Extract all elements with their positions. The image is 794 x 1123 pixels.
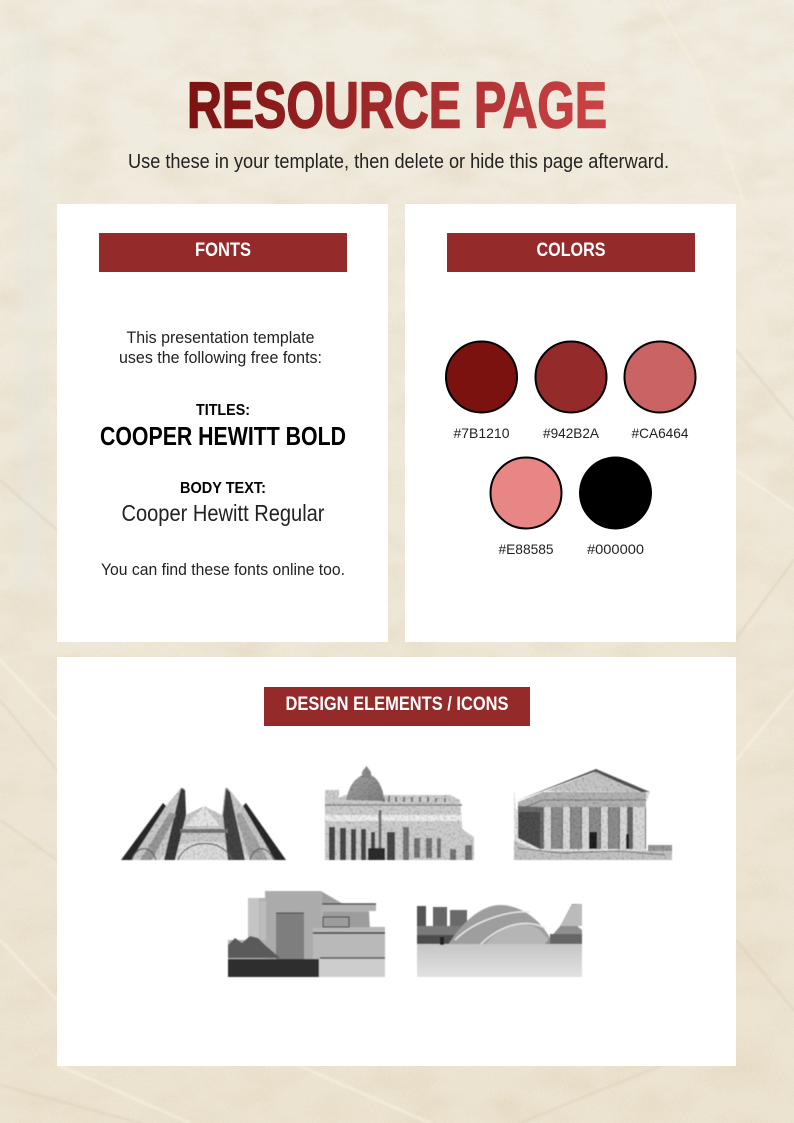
swatch #7B1210: #7B1210 <box>454 425 510 441</box>
swatch #CA6464: #CA6464 <box>632 425 689 441</box>
fonts heading <box>99 233 347 272</box>
subtitle: Use these in your template, then delete or hide this page afterward. <box>128 151 669 173</box>
design elements heading: DESIGN ELEMENTS / ICONS <box>286 694 508 715</box>
fonts heading: FONTS <box>195 240 251 261</box>
panel: colors <box>405 204 736 642</box>
swatch #000000 <box>579 456 652 557</box>
design elements heading <box>264 687 530 726</box>
fonts intro text: uses the following free fonts: <box>119 348 322 367</box>
fonts note: You can find these fonts online too. <box>101 560 345 579</box>
title: RESOURCE <box>187 68 461 142</box>
colors heading: COLORS <box>536 240 606 261</box>
icon: greek temple <box>514 769 672 860</box>
fonts intro text <box>119 328 322 367</box>
swatch #E88585 <box>490 458 562 557</box>
swatch #942B2A <box>536 342 606 441</box>
icon: modern building <box>228 891 385 977</box>
swatch #942B2A: #942B2A <box>543 425 600 441</box>
panel: design elements <box>57 657 736 1066</box>
swatch #7B1210 <box>446 342 517 441</box>
swatch #E88585: #E88585 <box>498 541 554 557</box>
colors heading <box>447 233 695 272</box>
fonts intro text: This presentation template <box>126 328 314 347</box>
panel: fonts <box>57 204 388 642</box>
body text font sample <box>122 480 325 526</box>
title: PAGE <box>474 68 607 142</box>
titles font sample: COOPER HEWITT BOLD <box>100 423 346 451</box>
icon: domed science center <box>417 904 582 977</box>
body text font sample: BODY TEXT: <box>180 480 266 497</box>
swatch #000000: #000000 <box>587 541 644 557</box>
icon: cathedral towers <box>121 788 286 860</box>
titles font sample <box>100 402 346 451</box>
swatch #CA6464 <box>624 342 696 441</box>
icon: basilica with dome <box>325 766 474 860</box>
titles font sample: TITLES: <box>196 402 250 419</box>
body text font sample: Cooper Hewitt Regular <box>122 500 325 526</box>
